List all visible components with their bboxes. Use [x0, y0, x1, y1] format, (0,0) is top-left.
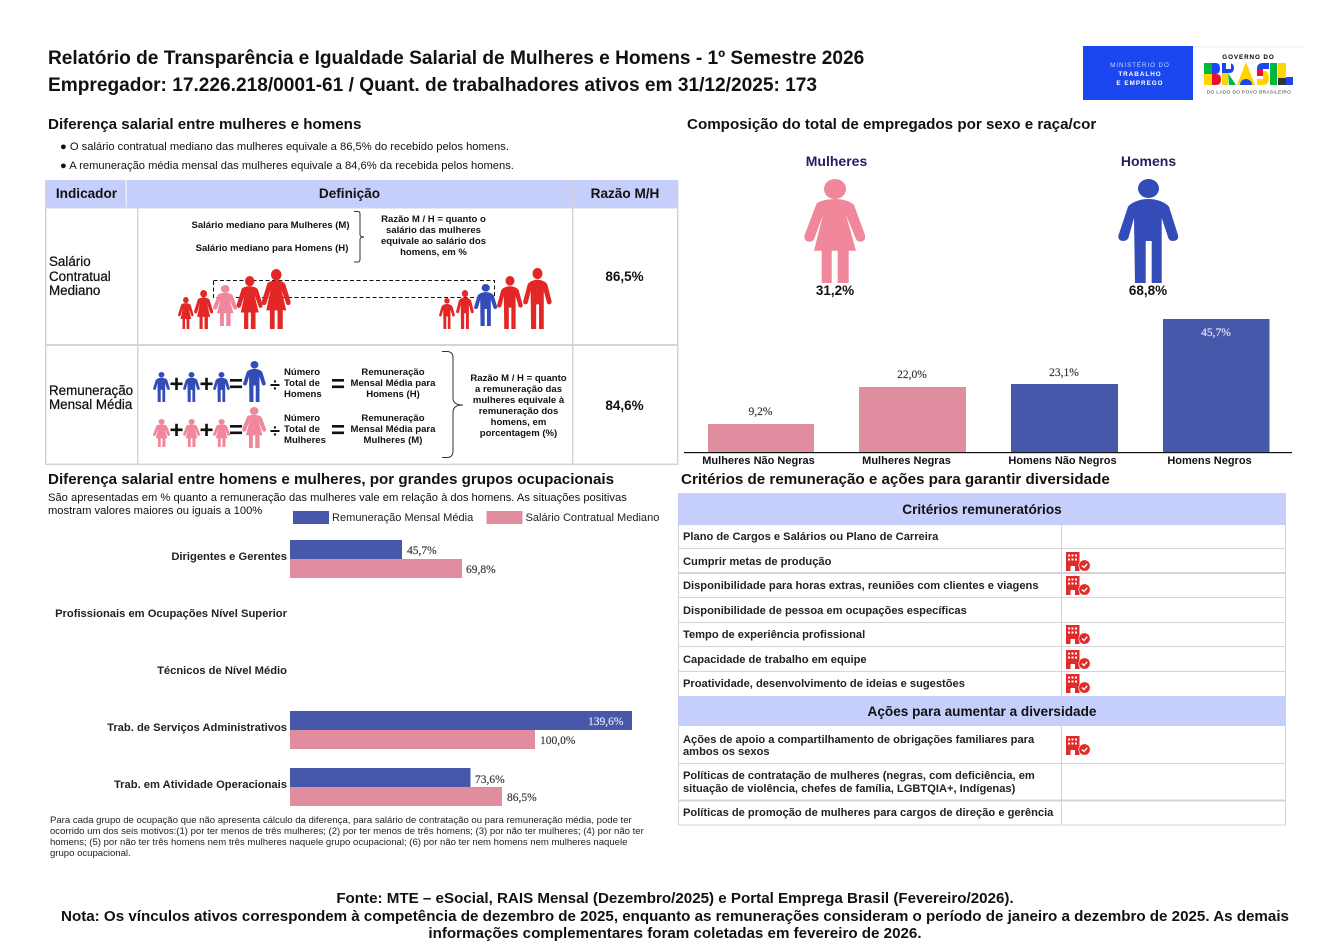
group: atividade operacional: 86,5%	[507, 792, 537, 804]
equation: women: +	[169, 417, 184, 444]
text block: razão M/H mediano	[381, 214, 486, 258]
equation: men: Total de	[284, 378, 320, 389]
text block: chart explanation: mostram valores maiores ou iguais a 100%	[48, 505, 262, 517]
group: dirigentes e gerentes: 69,8%	[466, 564, 496, 576]
row: ocupações específicas: Disponibilidade de pessoa em ocupações específicas	[683, 605, 967, 617]
label: homens: Homens	[1121, 153, 1176, 169]
group: dirigentes e gerentes	[171, 540, 496, 578]
title	[48, 48, 864, 96]
panel: indicator table	[45, 180, 678, 465]
column: homens não negros: Homens Não Negros	[1008, 455, 1117, 467]
legend: Remuneração Mensal Média	[332, 512, 474, 524]
column chart: sexo e raça	[684, 319, 1292, 467]
table header: critérios remuneratórios: Critérios remuneratórios	[902, 502, 1062, 517]
column: mulheres não negras: 9,2%	[749, 406, 773, 418]
table header: razão: Razão M/H	[591, 186, 659, 201]
logo: governo do brasil	[1193, 46, 1303, 96]
text block: source and note: Nota: Os vínculos ativos correspondem à competência de dezembro de 2025, enquanto as remunerações consideram o período de janeiro a dezembro de 2025. As demais	[61, 908, 1289, 925]
group: atividade operacional	[114, 768, 537, 806]
text block: bullets: ● A remuneração média mensal das mulheres equivale a 84,6% da recebida pelos homens.	[60, 160, 514, 172]
diagram: salário mediano labels: Salário mediano para Mulheres (M)	[191, 220, 350, 231]
row: trabalho em equipe: Capacidade de trabalho em equipe	[683, 654, 867, 666]
text block: razão M/H média: remuneração dos	[479, 406, 558, 417]
equation: men: +	[199, 371, 214, 398]
logo: ministério do trabalho e emprego: MINISTÉRIO DO	[1110, 60, 1170, 69]
logo: governo do brasil: DO LADO DO POVO BRASILEIRO	[1207, 90, 1291, 96]
equation: men: Mensal Média para	[351, 378, 436, 389]
value: razão salário mediano: 86,5%	[605, 269, 644, 284]
row: horas extras: Disponibilidade para horas extras, reuniões com clientes e viagens	[683, 580, 1039, 592]
equation: men	[153, 361, 436, 402]
group: serviços administrativos: 100,0%	[540, 735, 576, 747]
row: contratação	[683, 770, 1035, 795]
diagram: salário mediano labels	[191, 220, 350, 254]
icon group: women family	[178, 269, 291, 329]
icon: woman	[804, 179, 865, 283]
row: apoio familiar: Ações de apoio a compartilhamento de obrigações familiares para	[683, 734, 1035, 746]
equation: women: =	[229, 417, 243, 444]
value: mulheres: 31,2%	[816, 283, 854, 298]
column: homens não negros	[1008, 367, 1118, 467]
row: trabalho em equipe	[683, 650, 1090, 670]
text block: razão M/H média: mulheres equivale à	[473, 395, 565, 406]
text block: source and note	[61, 890, 1289, 942]
column: homens negros: Homens Negros	[1167, 455, 1252, 467]
group: dirigentes e gerentes: Dirigentes e Gerentes	[171, 551, 287, 563]
legend: Salário Contratual Mediano	[526, 512, 659, 524]
row: proatividade	[683, 674, 1090, 694]
group: técnicos: Técnicos de Nível Médio	[157, 665, 287, 677]
icon: man	[1118, 179, 1178, 283]
column: homens negros: 45,7%	[1201, 327, 1231, 339]
text block: razão M/H mediano: Razão M / H = quanto o	[381, 214, 486, 225]
equation: women: ÷	[270, 421, 280, 441]
row: apoio familiar: ambos os sexos	[683, 746, 770, 758]
equation: women: =	[331, 417, 345, 444]
text block: razão M/H mediano: homens, em %	[400, 247, 467, 258]
text block: footnote	[50, 815, 645, 859]
group: dirigentes e gerentes: 45,7%	[407, 545, 437, 557]
panel: criteria table	[678, 493, 1286, 826]
text block: razão M/H média: a remuneração das	[475, 384, 562, 395]
column: mulheres negras: Mulheres Negras	[862, 455, 951, 467]
row: contratação: situação de violência, chefes de família, LGBTQIA+, Indígenas)	[683, 783, 1016, 795]
dashed median box	[214, 280, 494, 298]
column: homens não negros: 23,1%	[1049, 367, 1079, 379]
group: atividade operacional: Trab. em Atividade Operacionais	[114, 779, 287, 791]
row: proatividade: Proatividade, desenvolvimento de ideias e sugestões	[683, 678, 965, 690]
row label: remuneração mensal média: Remuneração	[49, 383, 133, 398]
row: promoção: Políticas de promoção de mulheres para cargos de direção e gerência	[683, 807, 1054, 819]
row label: salário contratual mediano: Contratual	[49, 269, 111, 284]
text block: razão M/H média: homens, em	[491, 417, 546, 428]
row: horas extras	[683, 576, 1090, 596]
group: serviços administrativos	[107, 711, 632, 749]
logo: governo do brasil: GOVERNO DO	[1222, 54, 1275, 61]
heading: grupos ocupacionais: Diferença salarial entre homens e mulheres, por grandes grupos ocupacionais	[48, 471, 614, 488]
logo: ministério do trabalho e emprego: TRABALHO	[1118, 71, 1162, 78]
equation: men: Remuneração	[361, 367, 425, 378]
text block: source and note: informações complementares foram coletadas em fevereiro de 2026.	[428, 925, 922, 942]
heading: critérios: Critérios de remuneração e ações para garantir diversidade	[681, 471, 1110, 488]
row label: salário contratual mediano: Salário	[49, 254, 91, 269]
text block: razão M/H mediano: equivale ao salário dos	[381, 236, 486, 247]
text block: footnote: ocorrido um dos seis motivos:(1) por ter menos de três mulheres; (2) por ter menos de três homens; (3) por não ter mulheres; (4) por não ter	[50, 826, 645, 837]
equation: women: Remuneração	[361, 413, 425, 424]
equation: women: Mulheres	[284, 435, 326, 446]
value: homens: 68,8%	[1129, 283, 1167, 298]
equation: women: Mulheres (M)	[364, 435, 422, 446]
equation: men: Homens (H)	[366, 389, 420, 400]
equation: women: Número	[284, 413, 320, 424]
text block: razão M/H média	[470, 373, 567, 439]
column: homens negros	[1163, 319, 1270, 467]
row label: salário contratual mediano	[49, 254, 111, 298]
legend	[293, 511, 659, 524]
icon group: men family	[439, 268, 552, 329]
row: contratação: Políticas de contratação de mulheres (negras, com deficiência, em	[683, 770, 1035, 782]
equation: men: ÷	[270, 375, 280, 395]
group: serviços administrativos: Trab. de Serviços Administrativos	[107, 722, 287, 734]
equation: women	[153, 407, 436, 448]
diagram: salário mediano labels: Salário mediano para Homens (H)	[196, 243, 348, 254]
bar chart: occupational groups	[55, 540, 632, 806]
title: Empregador: 17.226.218/0001-61 / Quant. de trabalhadores ativos em 31/12/2025: 173	[48, 75, 817, 96]
row: apoio familiar	[683, 734, 1090, 758]
group: atividade operacional: 73,6%	[475, 774, 505, 786]
row label: salário contratual mediano: Mediano	[49, 283, 100, 298]
text block: bullets	[60, 141, 514, 172]
heading: composição: Composição do total de empregados por sexo e raça/cor	[687, 116, 1096, 133]
column: mulheres não negras	[702, 406, 815, 467]
equation: men: Número	[284, 367, 320, 378]
logo: ministério do trabalho e emprego: E EMPREGO	[1116, 80, 1164, 87]
text block: chart explanation: São apresentadas em % quanto a remuneração das mulheres vale em relação à dos homens. As situações positivas	[48, 492, 627, 504]
column: mulheres negras	[859, 369, 966, 467]
text block: footnote: homens; (5) por não ter três homens nem três mulheres naquele grupo ocupacional; (6) por não ter nem homens nem mulheres naquele	[50, 837, 627, 848]
text block: razão M/H mediano: salário das mulheres	[386, 225, 481, 236]
text block: chart explanation	[48, 492, 627, 517]
heading: diferença salarial: Diferença salarial entre mulheres e homens	[48, 116, 361, 133]
row: plano de cargos: Plano de Cargos e Salários ou Plano de Carreira	[683, 531, 939, 543]
row: experiência: Tempo de experiência profissional	[683, 629, 865, 641]
table header: indicador: Indicador	[56, 186, 118, 201]
brace: salário mediano	[354, 212, 364, 262]
brace: remuneração média	[442, 352, 463, 458]
logo: ministério do trabalho e emprego	[1083, 46, 1193, 100]
title: Relatório de Transparência e Igualdade Salarial de Mulheres e Homens - 1º Semestre 2026	[48, 48, 864, 69]
equation: men: =	[229, 371, 243, 398]
column: mulheres negras: 22,0%	[897, 369, 927, 381]
equation: men: +	[169, 371, 184, 398]
column: mulheres não negras: Mulheres Não Negras	[702, 455, 815, 467]
text block: footnote: Para cada grupo de ocupação que não apresenta cálculo da diferença, para salário de contratação ou para remuneração média, pode ter	[50, 815, 633, 826]
equation: women: +	[199, 417, 214, 444]
table header: ações diversidade: Ações para aumentar a diversidade	[868, 704, 1097, 719]
row: metas de produção: Cumprir metas de produção	[683, 556, 832, 568]
text block: footnote: grupo ocupacional.	[50, 848, 131, 859]
row: experiência	[683, 625, 1090, 644]
equation: women: Total de	[284, 424, 320, 435]
equation: men: =	[331, 371, 345, 398]
text block: razão M/H média: porcentagem (%)	[480, 428, 557, 439]
row label: remuneração mensal média	[49, 383, 133, 412]
group: profissionais: Profissionais em Ocupações Nível Superior	[55, 608, 288, 620]
row: metas de produção	[683, 552, 1090, 572]
group: serviços administrativos: 139,6%	[588, 716, 624, 728]
text block: bullets: ● O salário contratual mediano das mulheres equivale a 86,5% do recebido pelos homens.	[60, 141, 509, 153]
row label: remuneração mensal média: Mensal Média	[49, 397, 133, 412]
equation: men: Homens	[284, 389, 322, 400]
label: mulheres: Mulheres	[806, 153, 867, 169]
value: razão remuneração média: 84,6%	[605, 398, 644, 413]
text block: source and note: Fonte: MTE – eSocial, RAIS Mensal (Dezembro/2025) e Portal Emprega Brasil (Fevereiro/2026).	[336, 890, 1014, 907]
table header: definição: Definição	[319, 186, 380, 201]
equation: women: Mensal Média para	[351, 424, 436, 435]
text block: razão M/H média: Razão M / H = quanto	[470, 373, 567, 384]
